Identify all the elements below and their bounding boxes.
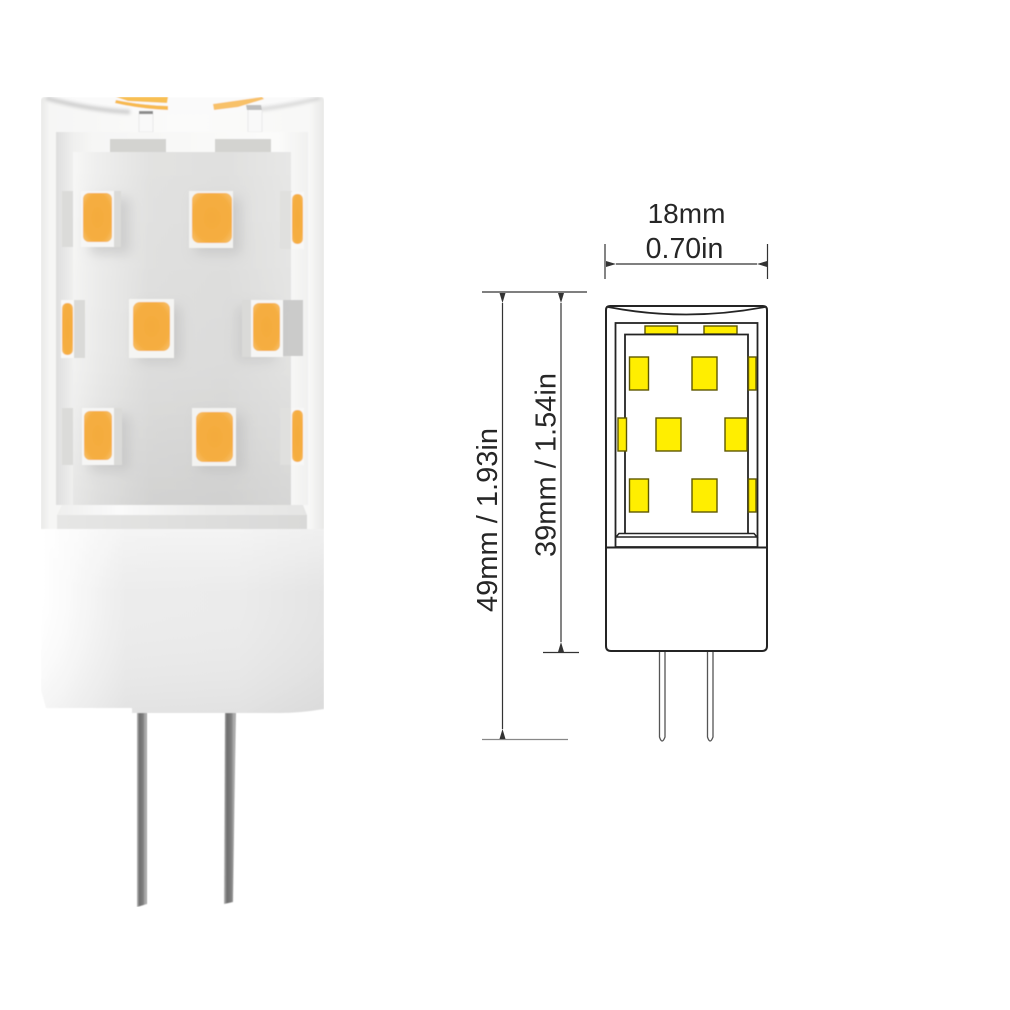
label: 39mm / 1.54in: 39mm / 1.54in	[530, 373, 562, 557]
drawing: base divider	[606, 546, 767, 548]
height dimension lines	[482, 292, 587, 740]
label: 18mm: 18mm	[648, 198, 725, 229]
drawing: top tabs	[645, 326, 737, 334]
drawing: ledge	[616, 534, 757, 537]
width extension lines and arrow	[605, 244, 768, 279]
height dimensions	[472, 292, 587, 740]
pins	[137, 706, 236, 907]
line drawing of bulb	[606, 306, 767, 741]
ceramic base	[41, 529, 324, 713]
LED row 1	[81, 191, 304, 254]
dome with amber LED reflections	[44, 97, 322, 132]
LED row 3	[82, 408, 304, 471]
label: 49mm / 1.93in: 49mm / 1.93in	[472, 428, 504, 612]
drawing: LEDs	[618, 357, 756, 512]
side contact bars	[62, 191, 303, 465]
top contact tabs	[110, 139, 271, 152]
carrier ledge	[57, 505, 307, 530]
drawing: dome curve	[608, 307, 765, 314]
width dimension	[605, 198, 768, 279]
drawing: outer shell and base	[606, 306, 767, 651]
translucent shell	[41, 97, 324, 530]
photo of G4 LED bulb	[41, 97, 324, 907]
drawing: pins	[660, 651, 713, 741]
drawing: front panel	[625, 334, 748, 533]
label: 0.70in: 0.70in	[646, 233, 723, 265]
front panel	[73, 152, 291, 505]
LED row 2	[61, 299, 283, 362]
inner LED carrier	[56, 132, 308, 505]
drawing: inner carrier	[616, 323, 758, 547]
